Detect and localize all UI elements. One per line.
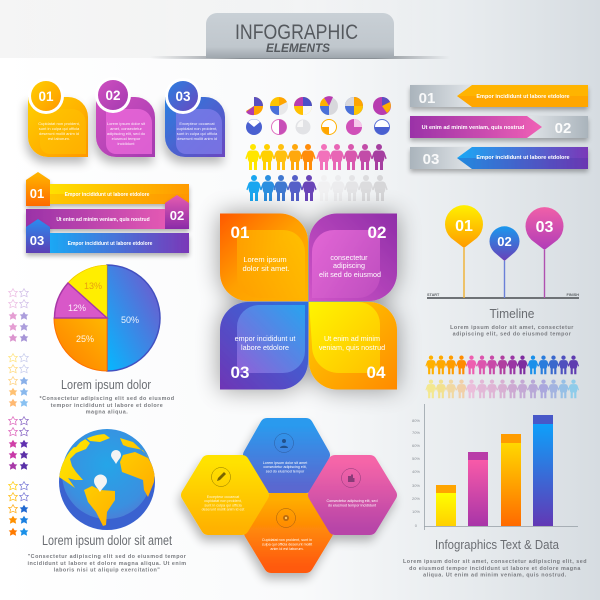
card 01: sunt in culpa qui officia: [39, 126, 80, 131]
timeline axis: START: [427, 293, 440, 297]
subtitle: ELEMENTS: [266, 43, 330, 55]
hexagon orange: culpa qui officia deserunt mollit: [262, 542, 312, 546]
petal 03: empor incididunt ut: [235, 334, 295, 343]
petal 01: [220, 214, 308, 301]
petal 03: 03: [231, 363, 249, 382]
card 03: deserunt mollit anim id: [177, 136, 217, 141]
panel: stacked banners: [26, 172, 189, 253]
panel: bar chart: [403, 404, 587, 578]
hexagon blue: Lorem ipsum dolor sit amet: [263, 461, 307, 465]
globe paragraph: incididunt ut labore et dolore magna aliqua. Ut enim: [28, 561, 186, 567]
pie heading: Lorem ipsum dolor: [61, 377, 152, 392]
bar 1: [436, 485, 456, 526]
card 02: eiusmod tempor: [112, 136, 141, 141]
chart paragraph: do eiusmod tempor incididunt ut labore et dolore magna: [409, 566, 581, 572]
hexagon blue: [250, 425, 323, 486]
hexagon yellow: cupidatat non proident,: [204, 499, 242, 503]
hexagon pink: [315, 462, 390, 528]
petal 02: 02: [368, 223, 386, 242]
arrow 02: 02: [555, 120, 571, 137]
petal 04: 04: [367, 363, 386, 382]
hexagon yellow: Excepteur occaecat: [207, 495, 239, 499]
y axis labels: 60%: [412, 443, 420, 448]
people row 1: [245, 144, 387, 170]
arrow 03: 03: [423, 151, 439, 168]
petal 01: Lorem ipsum: [243, 255, 287, 264]
y axis labels: 50%: [412, 456, 420, 461]
petal 02: consectetur: [330, 253, 368, 262]
hexagon blue: consectetur adipiscing elit,: [263, 465, 307, 469]
banner 03: 03: [30, 233, 44, 248]
pin 01: 01: [455, 218, 473, 235]
banner 03: Empor incididunt ut labore etdolore: [68, 241, 153, 247]
card 03: sunt in culpa qui officia: [177, 131, 218, 136]
card 02: adipiscing elit, sed do: [107, 131, 146, 136]
panel: petal quadrants: [220, 214, 397, 390]
timeline paragraph: adipiscing elit, sed do eiusmod tempor: [453, 332, 572, 338]
hexagon orange: [251, 500, 326, 566]
hexagon orange: Cupidatat non proident, sunt in: [262, 538, 312, 542]
card 02: [95, 77, 155, 157]
panel: timeline: [427, 205, 579, 338]
chart heading: Infographics Text & Data: [435, 537, 560, 552]
y axis labels: 0: [415, 523, 418, 528]
card 03: 03: [175, 89, 191, 104]
card 03: Excepteur occaecat: [179, 121, 215, 126]
people row solid: [425, 356, 579, 374]
globe: [59, 429, 155, 530]
pin 03: 03: [536, 219, 554, 236]
top band: [0, 0, 450, 58]
petal 04: [309, 302, 397, 390]
banner 01: 01: [30, 186, 44, 201]
star group 4: [9, 482, 28, 536]
petal 01: dolor sit amet.: [242, 264, 290, 273]
pie row 2: [246, 119, 390, 135]
pie paragraph: magna aliqua.: [86, 410, 128, 416]
pie paragraph: tempor incididunt ut labore et dolore: [51, 403, 163, 409]
y axis labels: 20%: [412, 496, 420, 501]
arrow 02: Ut enim ad minim veniam, quis nostrud: [422, 125, 524, 131]
petal 02: adipiscing: [333, 261, 365, 270]
card 02: Lorem ipsum dolor sit: [107, 121, 146, 126]
globe paragraph: "Consectetur adipiscing elit sed do eiusmod tempor: [28, 554, 187, 560]
hexagon orange: anim id est laborum.: [270, 547, 304, 551]
banner 01: Empor incididunt ut labore etdolore: [65, 192, 150, 198]
star group 1: [9, 289, 28, 342]
y axis labels: [412, 418, 420, 528]
people row faded: [425, 380, 579, 398]
panel: globe: [28, 429, 187, 574]
chart axes: [424, 404, 578, 530]
card 02: incididunt: [118, 141, 135, 146]
arrow 01: Empor incididunt ut labore etdolore: [476, 94, 570, 100]
hexagon yellow: deserunt mollit anim id est: [202, 508, 244, 512]
globe heading: Lorem ipsum dolor sit amet: [42, 533, 172, 548]
pin 02: 02: [497, 234, 512, 249]
hexagon yellow: [188, 462, 262, 528]
timeline paragraph: Lorem ipsum dolor sit amet, consectetur: [450, 325, 574, 331]
hexagon pink: Consectetur adipiscing elit, sed: [326, 499, 378, 503]
pin 03: [526, 207, 564, 298]
header: [150, 13, 450, 59]
card 02: 02: [105, 88, 121, 103]
panel: pie chart: [39, 265, 175, 416]
card 02: amet, consectetur: [110, 126, 143, 131]
arrow 02: [410, 116, 588, 138]
star group 2: [9, 354, 28, 407]
card 01: Cupidatat non proident,: [38, 121, 80, 126]
card 03: cupidatat non proident,: [177, 126, 217, 131]
bar 4: [533, 415, 553, 526]
panel: people icons top: [245, 144, 388, 201]
panel: star ratings: [9, 289, 28, 536]
panel: hexagon cluster: [188, 425, 390, 566]
petal 01: 01: [231, 223, 249, 242]
banner 02: [26, 195, 189, 229]
petal 02: elit sed do eiusmod: [319, 270, 381, 279]
y axis labels: 70%: [412, 430, 420, 435]
card 01: est laborum.: [48, 136, 70, 141]
bar 3: [501, 434, 521, 526]
panel: mini pie icons: [246, 96, 391, 135]
card 01: [28, 78, 88, 157]
pie paragraph: *Consectetur adipiscing elit sed do eiusmod: [39, 396, 175, 402]
arrow 03: Empor incididunt ut labore etdolore: [476, 155, 570, 161]
y axis labels: 10%: [412, 509, 420, 514]
pie: 50%: [121, 315, 139, 325]
petal 04: Ut enim ad minim: [324, 334, 380, 343]
pin 01: [445, 205, 483, 298]
title: INFOGRAPHIC: [235, 21, 358, 44]
pie row 1: [246, 96, 391, 115]
pie: 25%: [76, 334, 94, 344]
star group 3: [9, 417, 28, 470]
pie: 13%: [84, 281, 102, 291]
pie: 12%: [68, 303, 86, 313]
panel: people icons right: [425, 356, 579, 398]
y axis labels: 80%: [412, 418, 420, 423]
arrow 03: [410, 147, 588, 169]
petal 03: labore etdolore: [241, 343, 289, 352]
arrow 01: [410, 85, 588, 107]
pie: [54, 265, 160, 371]
y axis labels: 30%: [412, 483, 420, 488]
globe paragraph: laboris nisi ut aliquip exercitation": [54, 568, 160, 574]
y axis labels: 40%: [412, 469, 420, 474]
arrow 01: 01: [419, 90, 435, 107]
petal 03: [220, 302, 308, 390]
hexagon pink: do eiusmod tempor incididunt: [328, 504, 376, 508]
panel: numbered cards: [28, 77, 225, 157]
people row 2: [246, 175, 388, 201]
timeline axis: FINISH: [567, 293, 579, 297]
petal 04: veniam, quis nostrud: [319, 343, 385, 352]
chart paragraph: Lorem ipsum dolor sit amet, consectetur adipiscing elit, sed: [403, 559, 587, 565]
banner 01: [26, 172, 189, 206]
banner 02: Ut enim ad minim veniam, quis nostrud: [56, 217, 150, 223]
petal 02: [309, 214, 397, 301]
timeline heading: Timeline: [490, 306, 534, 321]
chart paragraph: aliqua. Ut enim ad minim veniam, quis nostrud.: [423, 572, 567, 578]
banner 02: 02: [170, 208, 184, 223]
panel: arrow banners: [410, 85, 588, 169]
timeline axis: [427, 293, 579, 299]
hexagon yellow: sunt in culpa qui officia: [204, 504, 243, 508]
bar 2: [468, 452, 488, 526]
hexagon blue: sed do eiusmod tempor: [266, 470, 305, 474]
card 03: [165, 78, 225, 157]
pin 02: [489, 226, 520, 298]
card 01: deserunt mollit anim id: [39, 131, 79, 136]
banner 03: [26, 219, 189, 253]
card 01: 01: [38, 89, 54, 104]
